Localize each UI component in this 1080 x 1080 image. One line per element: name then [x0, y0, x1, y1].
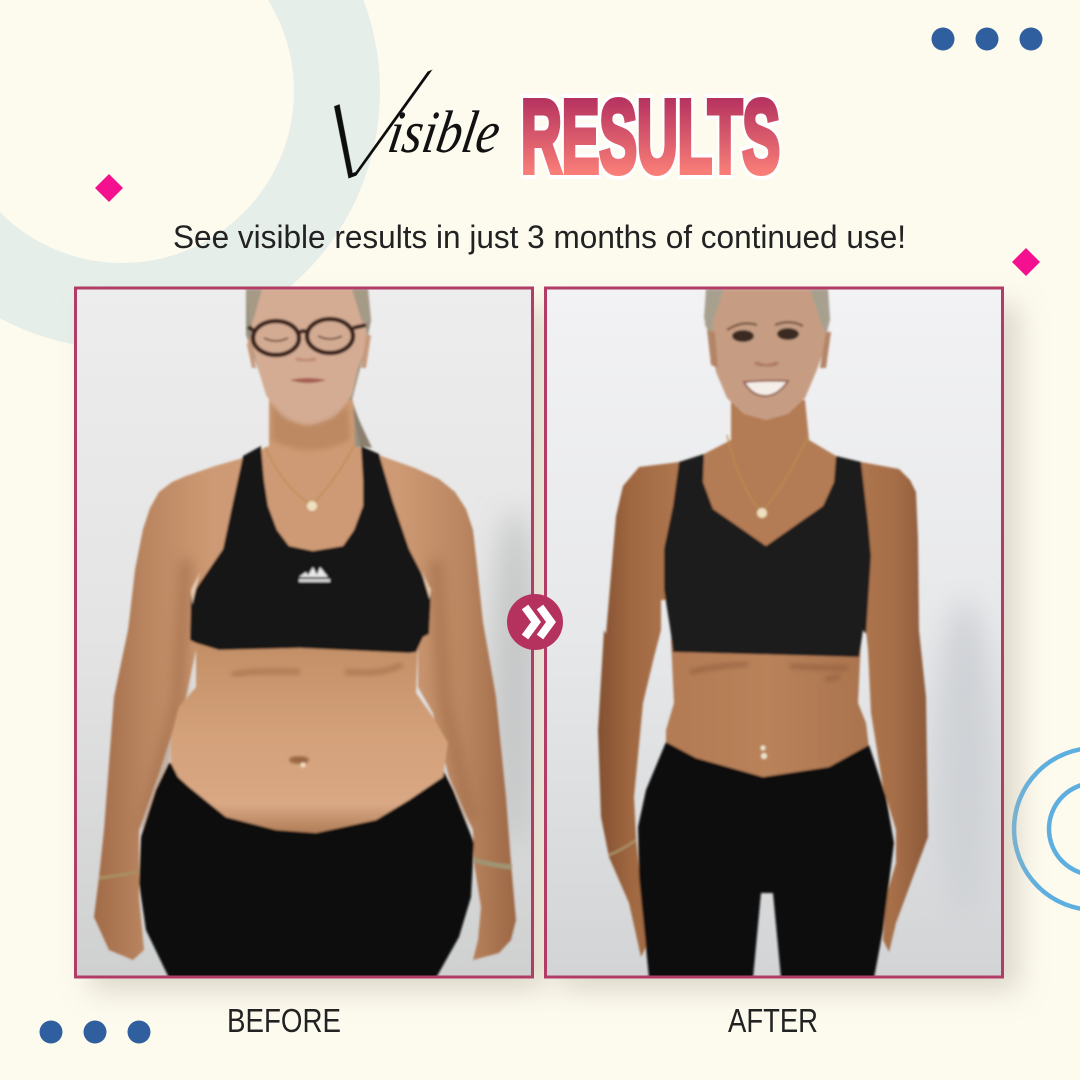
bra logo — [299, 567, 330, 582]
figure: after body — [598, 289, 928, 978]
panel border before — [76, 288, 532, 977]
concentric blue rings right — [1014, 748, 1080, 910]
panel: after photo — [546, 289, 1001, 978]
subtitle: See visible results in just 3 months of continued use! — [173, 219, 906, 255]
navel piercing — [760, 746, 767, 759]
figure: before body — [94, 289, 516, 978]
title bold word: RESULTS — [521, 79, 780, 194]
abdomen shading — [690, 664, 848, 680]
hair side strips — [247, 290, 370, 323]
panel border after — [546, 288, 1002, 977]
bracelet — [609, 840, 636, 855]
photo wall — [76, 289, 531, 976]
arms, neck and shoulders — [598, 400, 928, 957]
label after: AFTER — [728, 1002, 818, 1039]
eyelids — [264, 336, 342, 341]
figure shadow on wall — [491, 510, 539, 850]
hair — [246, 289, 371, 450]
smile — [744, 381, 788, 396]
dots bottom left — [40, 1020, 150, 1044]
hair side strips — [704, 289, 830, 332]
title bold word — [521, 79, 780, 194]
arrow badge — [507, 594, 563, 650]
title bold word: RESULTS — [521, 79, 780, 194]
panel shadows — [90, 305, 1018, 990]
belly — [171, 640, 448, 833]
bra side skin sliver — [191, 570, 431, 605]
crop top — [664, 454, 871, 657]
glasses bridge — [248, 325, 366, 333]
sports bra — [190, 446, 431, 653]
title script word: V — [285, 41, 449, 229]
face — [711, 289, 826, 420]
dots top right — [932, 28, 1042, 50]
mouth — [290, 378, 326, 383]
ear left and right — [247, 335, 371, 368]
glasses — [253, 319, 353, 355]
face — [252, 289, 367, 427]
abdomen — [666, 640, 869, 780]
title — [285, 41, 780, 229]
eyebrows — [727, 322, 803, 330]
photo wall — [546, 289, 1001, 976]
neck shadow — [272, 405, 350, 450]
arms, neck and shoulders — [94, 400, 516, 960]
decorative concentric circles top left — [0, 0, 380, 349]
necklace — [265, 445, 354, 505]
eyes — [732, 328, 799, 342]
title script word: isible — [384, 99, 505, 166]
label before: BEFORE — [227, 1002, 341, 1039]
belly folds — [232, 664, 402, 675]
nose — [755, 362, 778, 366]
figure shadow on wall — [935, 600, 995, 920]
ponytail shadow strip — [354, 412, 373, 450]
arm inner shading — [145, 560, 470, 830]
panel: before photo — [76, 289, 539, 978]
diamond right — [1012, 248, 1040, 276]
diamond left — [95, 174, 123, 202]
navel — [289, 756, 309, 768]
hair — [704, 320, 830, 333]
leggings — [638, 742, 894, 978]
nose — [296, 358, 316, 361]
bracelets — [99, 872, 137, 878]
navel line — [762, 725, 766, 748]
leggings — [139, 763, 474, 978]
ears — [707, 330, 831, 368]
necklace — [727, 435, 808, 512]
